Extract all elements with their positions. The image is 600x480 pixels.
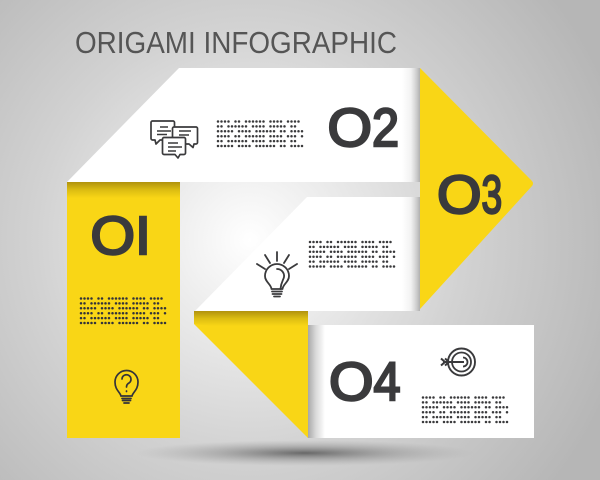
- icon: target with arrow: [441, 348, 475, 376]
- panel: yellow fold: [194, 311, 308, 438]
- text block: dotted copy 04: [423, 398, 507, 422]
- text block: dotted copy idea: [310, 242, 394, 266]
- icon: speech bubbles: [151, 121, 198, 158]
- panel: step 04: [308, 325, 534, 438]
- number: 03: O3: [437, 164, 502, 225]
- text block: dotted copy 02: [218, 122, 302, 146]
- panel: idea: [195, 197, 420, 311]
- number: 02: O2: [328, 97, 399, 158]
- panel: step 01: [67, 182, 180, 438]
- text block: dotted copy 01: [81, 298, 165, 323]
- title: ORIGAMI INFOGRAPHIC: [75, 25, 397, 60]
- icon: question bulb: [115, 370, 138, 403]
- number: 04: O4: [329, 351, 401, 412]
- panel: step 02: [67, 68, 420, 182]
- panel: step 03 arrow: [420, 68, 533, 309]
- ground shadow: [135, 440, 475, 466]
- icon: light bulb: [257, 252, 297, 296]
- number: 01: OI: [90, 205, 151, 266]
